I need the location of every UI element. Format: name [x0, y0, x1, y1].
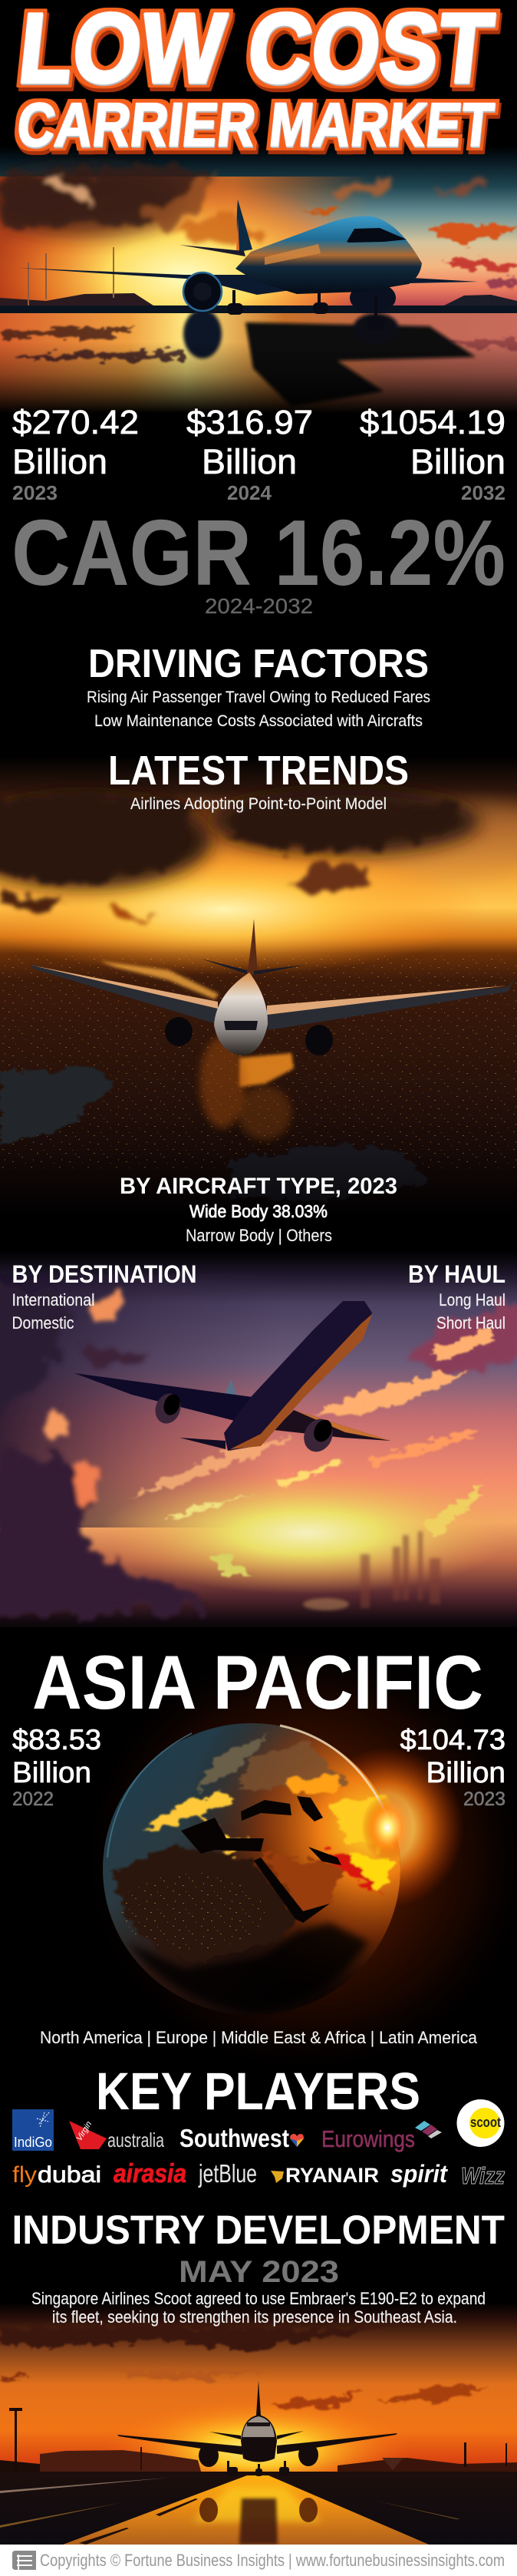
by aircraft type: BY AIRCRAFT TYPE, 2023 [120, 1174, 397, 1199]
plane [117, 2380, 397, 2476]
asia pacific heading: ASIA PACIFIC [32, 1640, 483, 1725]
continents [111, 1736, 393, 1965]
asia pacific 2023 value: 2023 [463, 1788, 505, 1810]
market size 2024: 2024 [227, 481, 272, 504]
market size 2023: Billion [12, 442, 107, 481]
lights on Africa [119, 1873, 265, 1950]
latest trends heading: LATEST TRENDS [108, 748, 409, 794]
CAGR period: 2024-2032 [205, 594, 313, 618]
bright cloud streaks [130, 1328, 499, 1577]
image: airliner climbing through pink sunset [0, 1251, 517, 1627]
asia pacific 2022 value: $83.53 [12, 1724, 101, 1755]
globe rim [107, 1733, 192, 1858]
by destination: Domestic [12, 1313, 74, 1333]
asia pacific 2023 value: Billion [426, 1757, 505, 1789]
skyline [361, 1531, 440, 1608]
market size 2023: 2023 [12, 481, 58, 504]
plane reflection [183, 309, 476, 407]
development description: its fleet, seeking to strengthen its presence in Southeast Asia. [52, 2307, 457, 2327]
market size 2032: Billion [410, 442, 505, 481]
by aircraft type: Wide Body 38.03% [189, 1201, 328, 1221]
asia pacific 2022 value [12, 1724, 101, 1810]
hero image: airliner on wet apron at sunset [0, 146, 517, 413]
market size 2032 [360, 404, 505, 504]
asia pacific 2023 value [400, 1724, 505, 1810]
driving factors heading: DRIVING FACTORS [88, 642, 429, 686]
logo: Virgin Australia [69, 2120, 164, 2152]
clouds [0, 796, 460, 920]
by haul [408, 1260, 505, 1333]
logo: IndiGo [12, 2109, 54, 2151]
glowing river [100, 961, 294, 1087]
logo: Spirit: spirit [390, 2160, 448, 2188]
market size 2032: 2032 [461, 481, 505, 504]
large soft storm clouds [0, 793, 211, 888]
dark seas [181, 1796, 341, 1923]
logo: Virgin Australia: australia [107, 2129, 164, 2152]
ground vehicles [0, 293, 153, 309]
by aircraft type: Narrow Body | Others [186, 1226, 332, 1245]
market size 2023: $270.42 [12, 404, 139, 441]
market size 2023 [12, 404, 139, 504]
market size 2024 [186, 404, 313, 504]
logo: IndiGo: IndiGo [14, 2135, 52, 2150]
logo: Scoot: scoot [470, 2115, 501, 2130]
clouds [0, 2326, 491, 2409]
city lights [0, 956, 517, 1171]
development description [31, 2289, 486, 2327]
logo: flydubai: fly [12, 2162, 37, 2188]
by haul: Long Haul [439, 1290, 505, 1309]
footer logo [12, 2551, 36, 2570]
driving factors list: Rising Air Passenger Travel Owing to Reduced Fares [87, 689, 430, 706]
logo: flydubai [12, 2162, 101, 2188]
plane [18, 200, 478, 330]
logo: Virgin Australia: Virgin [74, 2120, 94, 2143]
clouds [0, 161, 491, 247]
title [14, 0, 498, 159]
plane [74, 1301, 390, 1457]
footer [0, 2545, 517, 2576]
asia pacific 2023 value: $104.73 [400, 1724, 505, 1755]
latest trends text: Airlines Adopting Point-to-Point Model [130, 795, 387, 813]
asia pacific 2022 value: 2022 [12, 1788, 54, 1810]
logo: jetBlue: jetBlue [198, 2159, 257, 2188]
market size 2024: Billion [202, 442, 297, 481]
clouds [0, 1278, 517, 1616]
by haul: Short Haul [436, 1313, 505, 1333]
logo: Southwest: Southwest [179, 2124, 289, 2152]
ground [0, 2472, 517, 2545]
terminal buildings [40, 2450, 201, 2472]
logo: AirAsia: airasia [114, 2159, 186, 2188]
by haul: BY HAUL [408, 1260, 505, 1288]
asia pacific 2022 value: Billion [12, 1757, 91, 1789]
logo: flydubai: dubai [38, 2162, 101, 2188]
lit coastlines [145, 1792, 249, 1858]
lake [0, 1068, 430, 1201]
by destination [12, 1260, 196, 1333]
logo: Scoot [457, 2099, 505, 2147]
market size 2024: $316.97 [186, 404, 313, 441]
by destination: BY DESTINATION [12, 1260, 196, 1288]
driving factors list [87, 689, 430, 730]
image: airliner over city at sunset [0, 756, 517, 1243]
lower dark hemisphere [127, 1923, 368, 2013]
by aircraft type [120, 1174, 397, 1245]
image: airliner landing at sunset [0, 2303, 517, 2545]
development date: MAY 2023 [179, 2255, 339, 2289]
logo: Ryanair: RYANAIR [285, 2164, 379, 2187]
other regions: North America | Europe | Middle East & Africa | Latin America [40, 2028, 478, 2047]
logo: Wizz: Wizz [461, 2162, 505, 2189]
by destination: International [12, 1290, 95, 1309]
driving factors list: Low Maintenance Costs Associated with Aircrafts [94, 712, 423, 730]
market size 2032: $1054.19 [360, 404, 505, 441]
runway with reflection [63, 2475, 429, 2545]
image: glowing earth globe [0, 1627, 517, 2080]
logo: Eurowings: Eurowings [321, 2125, 415, 2152]
plane [30, 919, 515, 1055]
key players heading: KEY PLAYERS [96, 2062, 420, 2121]
